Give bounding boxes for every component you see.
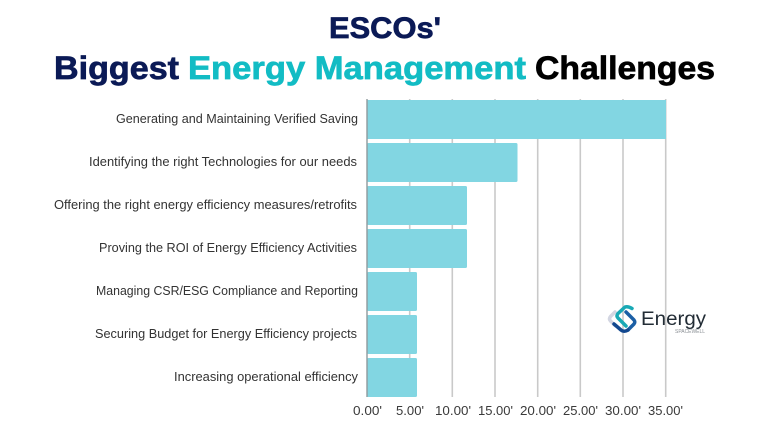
icon: logo mark xyxy=(610,307,635,331)
value axis labels xyxy=(353,404,683,418)
value axis labels: 25.00' xyxy=(563,404,598,418)
category labels: Securing Budget for Energy Efficiency projects xyxy=(95,327,357,341)
value axis labels: 35.00' xyxy=(648,404,683,418)
title xyxy=(54,12,715,86)
value axis labels: 10.00' xyxy=(435,404,471,418)
category labels: Managing CSR/ESG Compliance and Reporting xyxy=(96,284,358,298)
value axis labels: 0.00' xyxy=(353,404,382,418)
category labels xyxy=(54,112,359,384)
value axis labels: 15.00' xyxy=(478,404,513,418)
category labels: Generating and Maintaining Verified Saving xyxy=(116,112,358,126)
logo: Energy Spacewell xyxy=(610,307,707,335)
title line 2: Challenges: Challenges xyxy=(535,50,715,86)
logo wordmark: Energy xyxy=(641,309,707,330)
category labels: Identifying the right Technologies for our needs xyxy=(89,155,357,169)
value axis labels: 30.00' xyxy=(605,404,641,418)
bar chart xyxy=(54,99,683,418)
category labels: Offering the right energy efficiency measures/retrofits xyxy=(54,198,357,212)
title line 1: ESCOs' xyxy=(329,12,441,45)
bars xyxy=(367,100,666,397)
logo subtitle: SPACEWELL xyxy=(675,329,705,335)
title line 2: Biggest: Biggest xyxy=(54,50,179,86)
value axis labels: 20.00' xyxy=(520,404,556,418)
vertical axis xyxy=(366,99,368,397)
category labels: Increasing operational efficiency xyxy=(174,370,359,384)
value axis labels: 5.00' xyxy=(396,404,424,418)
title line 2: Energy Management: Energy Management xyxy=(188,50,526,86)
category labels: Proving the ROI of Energy Efficiency Activities xyxy=(99,241,357,255)
